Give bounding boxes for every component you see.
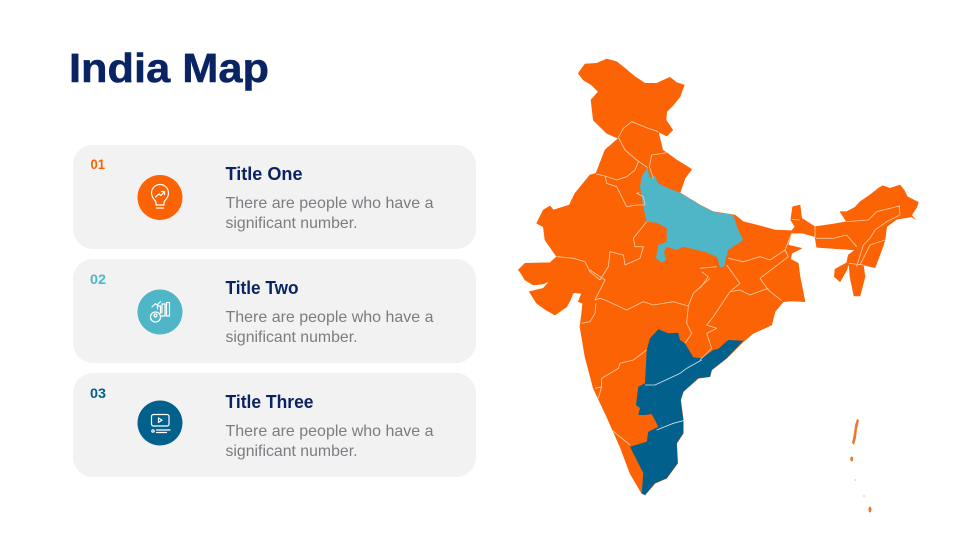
panel: item one xyxy=(73,145,476,249)
title: India Map xyxy=(69,45,269,91)
panel: item three xyxy=(73,373,476,477)
text: description two: significant number. xyxy=(226,329,358,346)
map: orange mainland xyxy=(518,59,918,495)
map: northern state borders xyxy=(557,122,667,280)
map: Uttar Pradesh teal xyxy=(640,167,743,267)
text: description one: significant number. xyxy=(226,215,358,232)
heading: Title One: Title One xyxy=(226,164,302,184)
number 01: 01 xyxy=(90,156,105,172)
icon: video player xyxy=(138,400,182,446)
map: southern states dark blue xyxy=(630,329,743,495)
icon: light bulb with rising arrow xyxy=(138,175,182,220)
heading: Title Two: Title Two xyxy=(226,278,298,298)
map: Andaman and Nicobar islands xyxy=(850,419,872,512)
icon: growth bars with person xyxy=(138,290,182,334)
number 02: 02 xyxy=(90,271,106,287)
text: description two: There are people who have a xyxy=(226,309,434,326)
map of India xyxy=(518,59,918,512)
panel: item two xyxy=(73,259,476,363)
text: description one: There are people who have a xyxy=(226,195,434,212)
heading: Title Three: Title Three xyxy=(226,392,314,412)
number 03: 03 xyxy=(90,385,106,401)
text: description three: There are people who have a xyxy=(226,423,434,440)
map: eastern state borders xyxy=(700,206,900,360)
text: description three: significant number. xyxy=(226,443,358,460)
map: central and western state borders xyxy=(582,270,710,445)
